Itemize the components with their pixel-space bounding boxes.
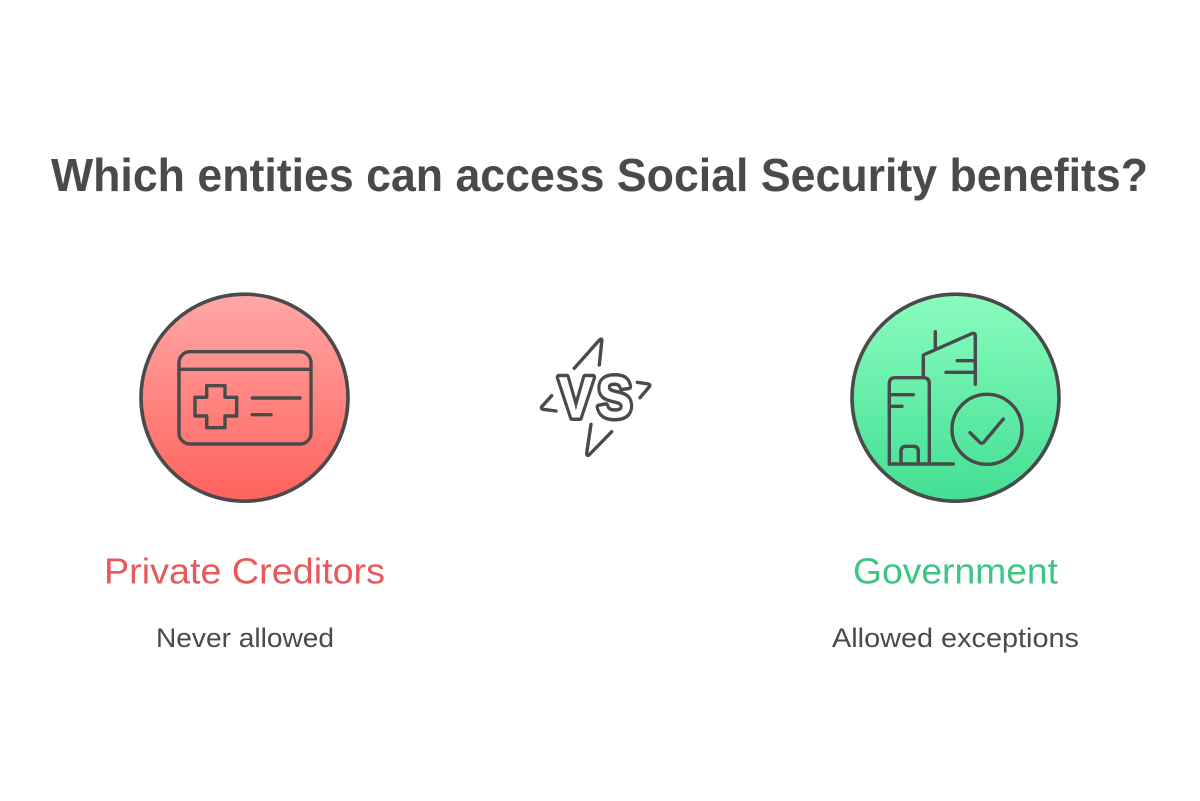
heading: private creditors: Private Creditors	[104, 550, 385, 592]
icon: green circle with buildings and check	[852, 294, 1059, 501]
text: never allowed: Never allowed	[156, 623, 334, 653]
panel: government	[832, 294, 1079, 653]
text: allowed exceptions: Allowed exceptions	[832, 623, 1079, 653]
label: VS: VS	[558, 365, 632, 430]
heading: government: Government	[853, 550, 1058, 592]
icon: vs lightning badge	[541, 339, 650, 455]
panel: private creditors	[104, 294, 385, 653]
title: Which entities can access Social Security benefits?	[51, 149, 1148, 201]
icon: red circle with medical card	[141, 294, 348, 501]
